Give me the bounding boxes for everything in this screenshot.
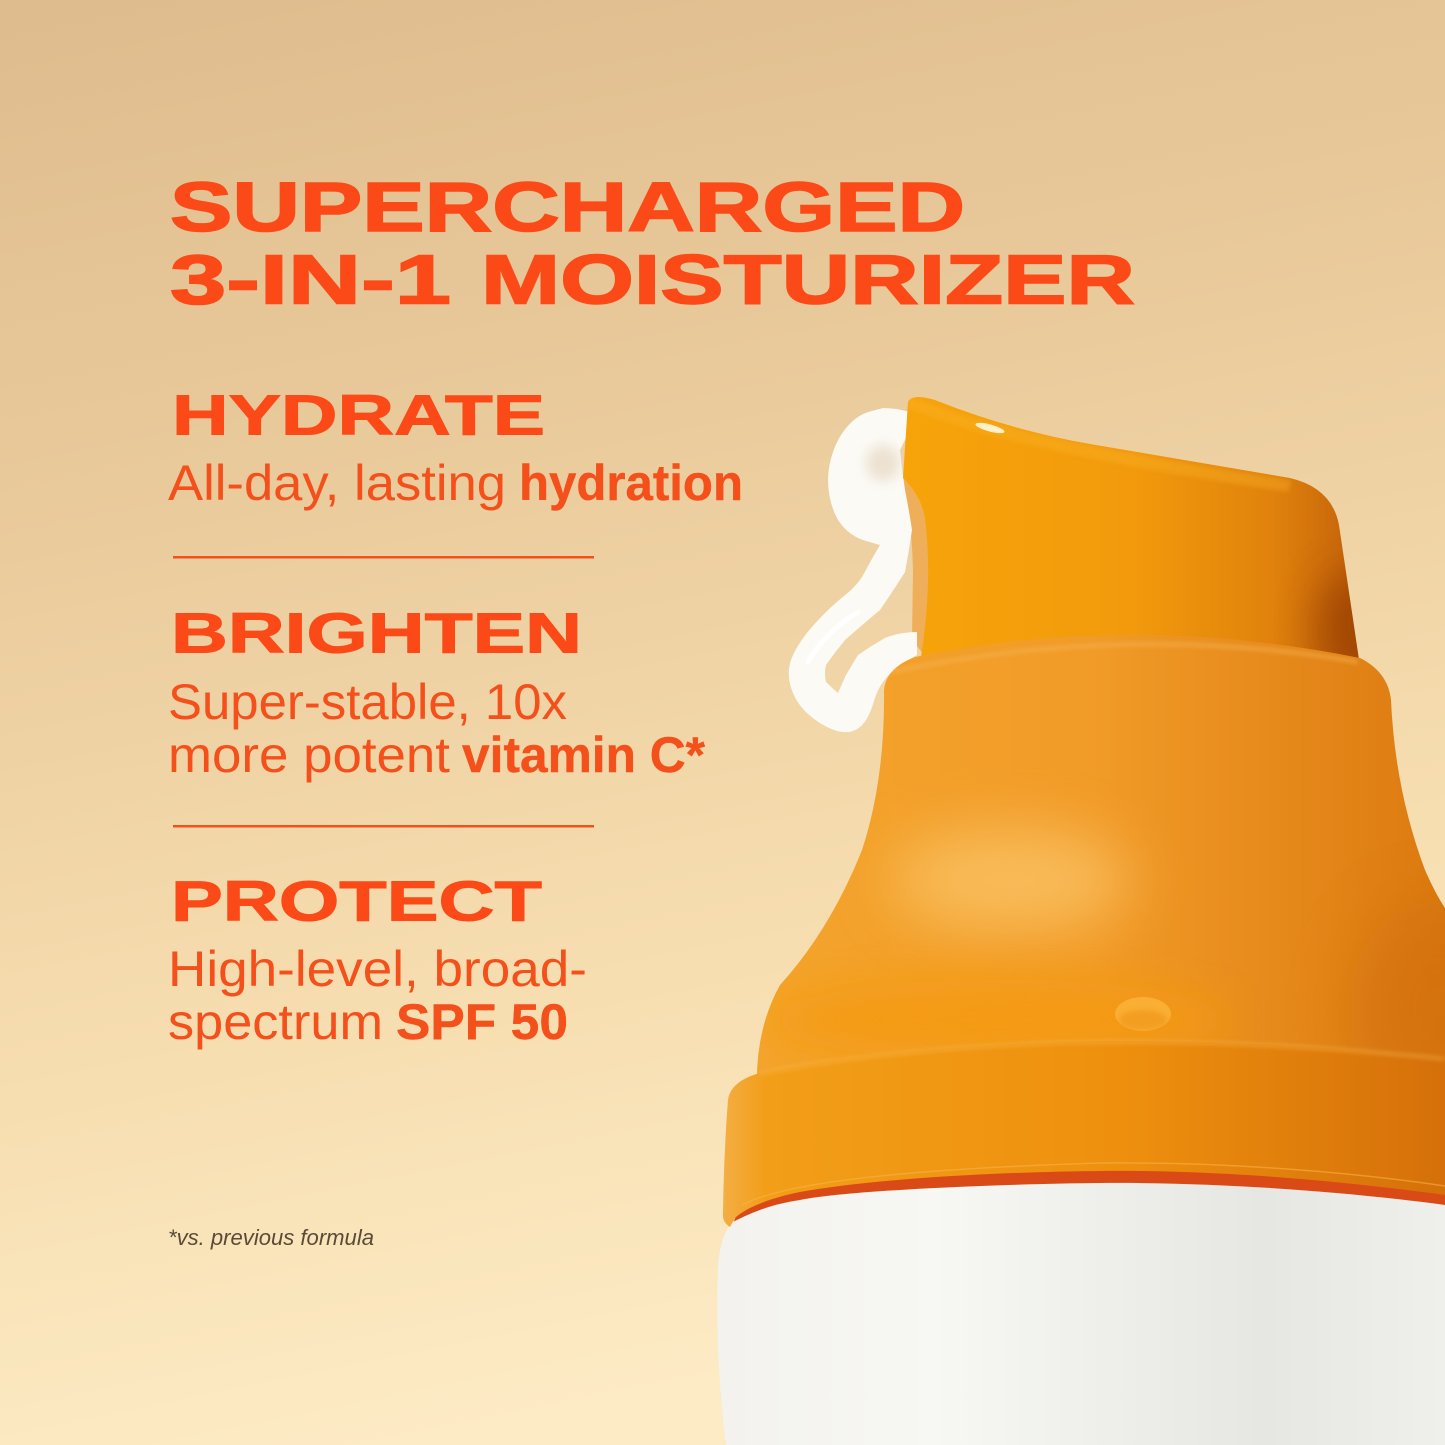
text: brighten description: more potent bbox=[168, 727, 450, 783]
title: SUPERCHARGED bbox=[170, 168, 965, 246]
text: hydrate description: hydration bbox=[519, 455, 743, 511]
text: protect description bbox=[168, 941, 587, 1050]
divider 2 bbox=[173, 825, 594, 828]
cream shadow bbox=[866, 445, 900, 481]
product: pump bottle bbox=[717, 390, 1445, 1445]
top edge highlight bbox=[890, 644, 1358, 672]
nozzle top sheen bbox=[908, 402, 1290, 486]
text: protect description: SPF 50 bbox=[396, 994, 568, 1050]
text: hydrate description bbox=[168, 455, 743, 511]
heading: brighten: BRIGHTEN bbox=[171, 602, 582, 666]
red rim under collar bbox=[733, 1150, 1445, 1224]
text: protect description: spectrum bbox=[168, 994, 383, 1050]
shoulder bbox=[757, 634, 1445, 1074]
collar top highlight bbox=[760, 1042, 1445, 1074]
section: protect bbox=[168, 870, 587, 1050]
cream glossy highlight bbox=[808, 612, 858, 662]
section: brighten bbox=[168, 602, 706, 783]
nozzle top highlight bbox=[975, 421, 1005, 435]
text: brighten description: vitamin C* bbox=[462, 727, 706, 783]
collar ring bbox=[723, 1041, 1445, 1227]
title bbox=[170, 168, 1135, 318]
section: hydrate bbox=[168, 384, 743, 511]
nozzle inner lip bbox=[901, 477, 930, 656]
text: brighten description bbox=[168, 674, 706, 783]
title: MOISTURIZER bbox=[481, 240, 1135, 318]
heading: hydrate: HYDRATE bbox=[172, 384, 545, 448]
shoulder highlight bbox=[890, 830, 1130, 930]
bump bbox=[1115, 997, 1171, 1031]
heading: protect: PROTECT bbox=[171, 870, 542, 934]
footnote: *vs. previous formula bbox=[168, 1225, 374, 1250]
text: brighten description: Super-stable, 10x bbox=[168, 674, 567, 730]
divider 1 bbox=[173, 556, 594, 558]
bottle body bbox=[717, 1183, 1445, 1445]
right shading bbox=[1368, 894, 1445, 1054]
collar lower lip line bbox=[742, 1163, 1445, 1205]
nozzle bottom-right shadow bbox=[1297, 560, 1359, 658]
text: hydrate description: All-day, lasting bbox=[168, 455, 506, 511]
cream bbox=[789, 408, 917, 732]
text: protect description: High-level, broad- bbox=[168, 941, 587, 997]
title: 3-IN-1 bbox=[170, 240, 451, 318]
nozzle bbox=[903, 397, 1359, 658]
saturated lower band bbox=[770, 980, 1230, 1060]
